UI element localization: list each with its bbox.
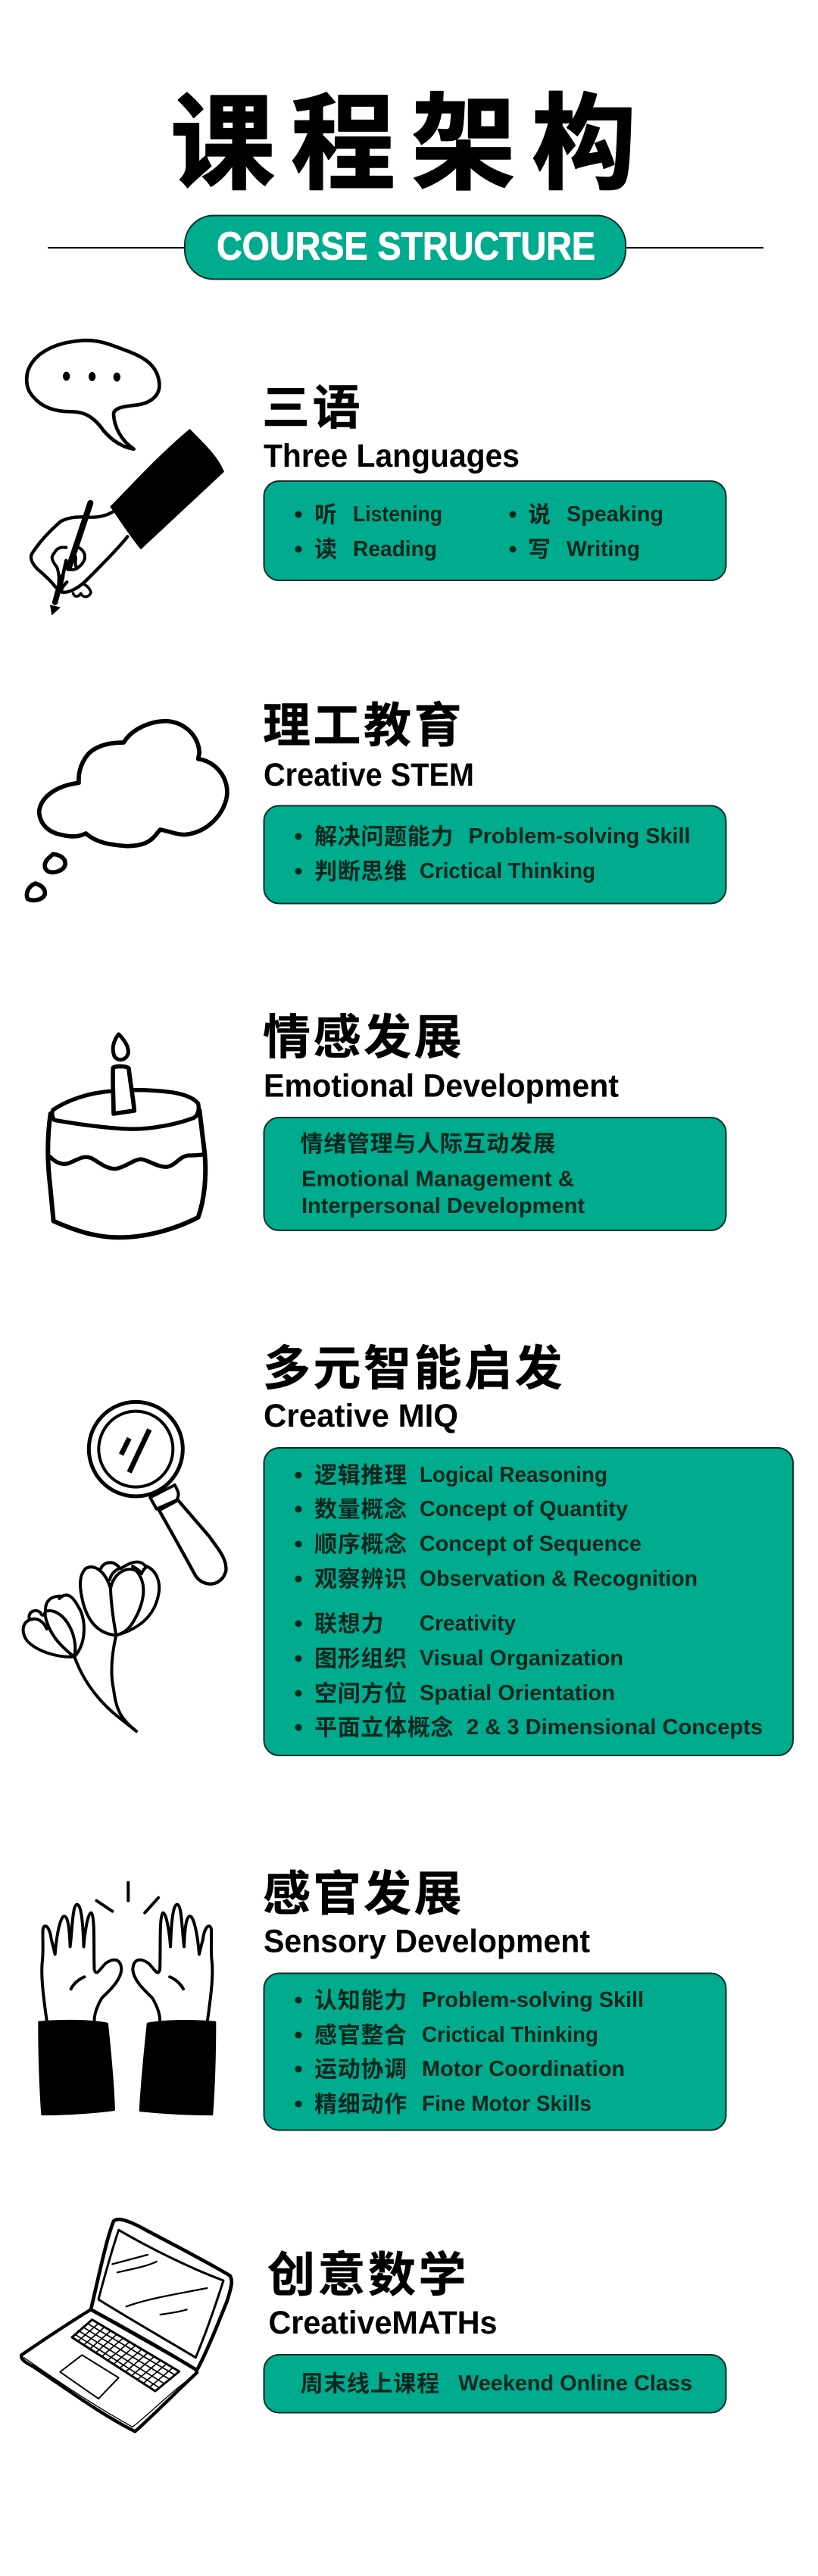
icon: tulips (23, 1562, 159, 1731)
panel: MIQ list: 联想力 (314, 1612, 384, 1637)
subheading: Sensory Development (264, 1923, 590, 1959)
panel: STEM list: Problem-solving Skill (468, 824, 691, 849)
panel: MIQ list: Visual Organization (420, 1646, 623, 1671)
panel: MIQ list: 逻辑推理 (314, 1464, 407, 1488)
panel: STEM list (264, 806, 726, 903)
icon: birthday cake (48, 1034, 205, 1237)
panel: MIQ list: Concept of Quantity (420, 1497, 628, 1521)
panel: languages list: Writing (567, 537, 640, 561)
subheading: Emotional Development (264, 1068, 619, 1105)
panel: MIQ list (264, 1448, 793, 1755)
icon: speech bubble and writing hand (27, 340, 224, 615)
heading: 多元智能启发 (263, 1343, 565, 1396)
heading: 三语 (262, 382, 363, 435)
subheading: Three Languages (264, 438, 520, 474)
panel: sensory list: Problem-solving Skill (422, 1988, 644, 2012)
panel: languages list: 听 (314, 503, 338, 527)
panel: languages list: Reading (353, 537, 437, 561)
subtitle banner: COURSE STRUCTURE (217, 224, 595, 268)
panel: languages list (264, 481, 726, 580)
panel: emotional text: 情绪管理与人际互动发展 (300, 1132, 556, 1157)
panel: sensory list: 运动协调 (314, 2058, 407, 2082)
panel: MIQ list: Spatial Orientation (420, 1681, 615, 1705)
section: creative STEM (27, 700, 726, 903)
panel: MIQ list: 空间方位 (314, 1680, 407, 1706)
section: creative maths (21, 2219, 726, 2431)
subheading: Creative STEM (264, 757, 474, 793)
panel: weekend class: 周末线上课程 (300, 2371, 440, 2397)
section: three languages (27, 340, 726, 615)
panel: sensory list (264, 1973, 726, 2131)
panel: languages list: 写 (528, 538, 551, 562)
panel: MIQ list: Concept of Sequence (420, 1532, 642, 1556)
section: creative MIQ (23, 1343, 793, 1755)
panel: STEM list: 判断思维 (314, 859, 407, 885)
panel: emotional text: Interpersonal Development (301, 1194, 585, 1218)
panel: sensory list: 感官整合 (314, 2023, 407, 2049)
panel: weekend class: Weekend Online Class (458, 2371, 692, 2396)
panel: emotional text (264, 1118, 726, 1230)
panel: sensory list: Crictical Thinking (422, 2023, 598, 2047)
panel: MIQ list: 观察辨识 (314, 1567, 407, 1593)
icon: raised hands (39, 1883, 215, 2115)
section: emotional development (48, 1011, 726, 1237)
heading: 情感发展 (263, 1011, 464, 1064)
heading: 理工教育 (263, 700, 464, 753)
panel: sensory list: Fine Motor Skills (422, 2092, 592, 2116)
icon: thought cloud (27, 721, 227, 900)
panel: sensory list: 精细动作 (314, 2093, 407, 2117)
panel: MIQ list: Creativity (420, 1612, 516, 1636)
panel: languages list: 说 (528, 503, 551, 527)
icon: laptop (21, 2219, 232, 2431)
section: sensory development (39, 1868, 726, 2131)
subheading: Creative MIQ (264, 1398, 458, 1434)
panel: MIQ list: 2 & 3 Dimensional Concepts (467, 1715, 763, 1740)
panel: sensory list: Motor Coordination (422, 2057, 625, 2081)
panel: MIQ list: Observation & Recognition (420, 1567, 698, 1591)
panel: weekend class (264, 2355, 726, 2412)
subheading: CreativeMATHs (268, 2305, 497, 2341)
panel: MIQ list: Logical Reasoning (420, 1463, 607, 1487)
heading: 创意数学 (267, 2249, 469, 2302)
panel: languages list: Listening (353, 502, 442, 527)
panel: MIQ list: 顺序概念 (314, 1532, 407, 1558)
panel: STEM list: 解决问题能力 (314, 824, 454, 850)
panel: MIQ list: 图形组织 (314, 1647, 407, 1671)
panel: emotional text: Emotional Management & (301, 1167, 574, 1191)
panel: MIQ list: 平面立体概念 (314, 1715, 454, 1741)
icon: magnifying glass (89, 1402, 226, 1584)
heading: 感官发展 (263, 1868, 464, 1921)
subtitle banner (48, 215, 763, 279)
panel: languages list: 读 (314, 538, 338, 562)
panel: languages list: Speaking (567, 502, 663, 527)
title: 课程架构 (170, 86, 652, 203)
panel: STEM list: Crictical Thinking (420, 859, 595, 883)
panel: sensory list: 认知能力 (314, 1988, 407, 2014)
panel: MIQ list: 数量概念 (314, 1497, 407, 1523)
